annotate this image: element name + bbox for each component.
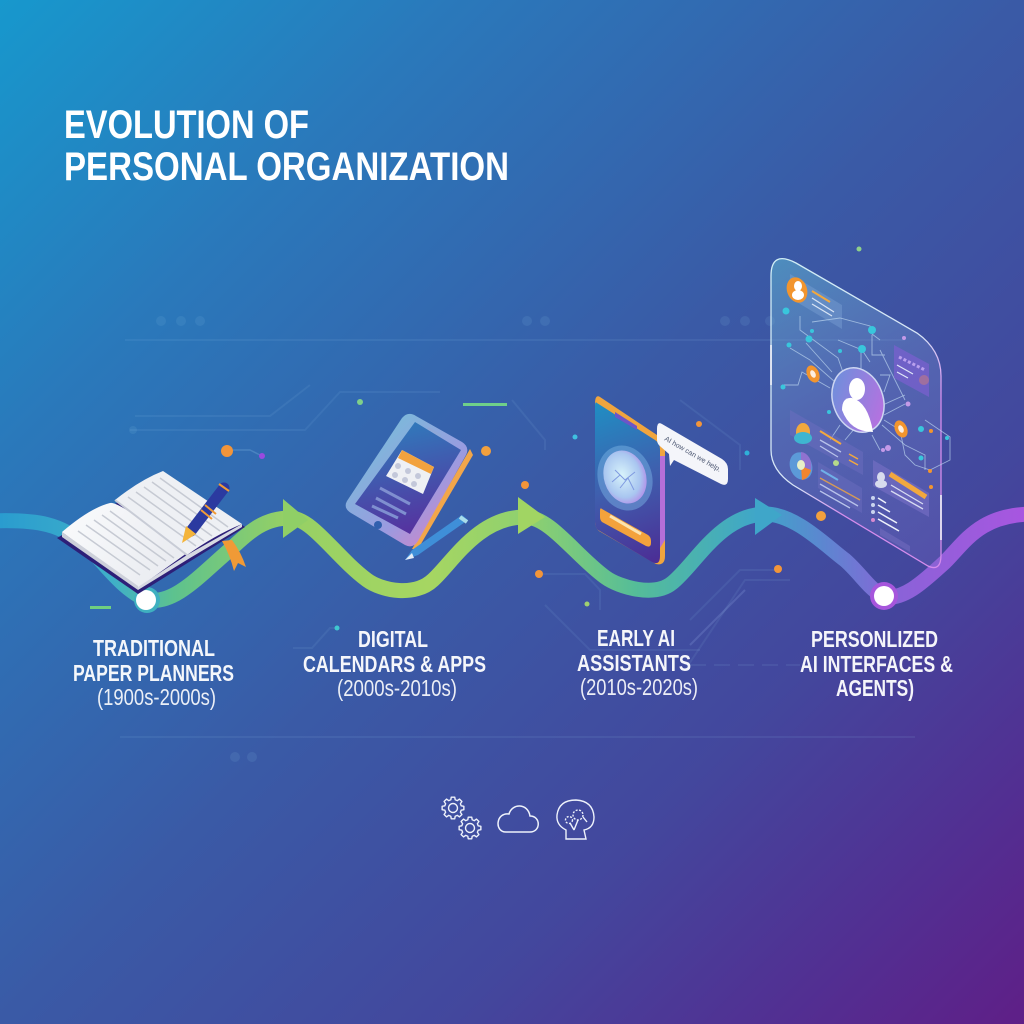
chat bubble (657, 423, 728, 485)
accent dots (90, 246, 862, 630)
label: early AI assistants: EARLY AI (597, 625, 675, 651)
label: digital calendars and apps (303, 626, 486, 701)
donut chart (786, 449, 816, 483)
label: traditional paper planners: (1900s-2000s) (97, 684, 216, 710)
title (64, 103, 509, 189)
icon: open planner book with pen (57, 471, 246, 594)
icon: tablet with calendar and stylus (346, 414, 473, 560)
network nodes (780, 308, 949, 489)
network lines (782, 316, 950, 470)
label: personalized AI interfaces and agents: AGENTS) (836, 675, 914, 701)
label: digital calendars and apps: (2000s-2010s) (337, 675, 457, 701)
label: early AI assistants (577, 625, 698, 700)
label: digital calendars and apps: CALENDARS & APPS (303, 651, 486, 677)
user card (783, 274, 842, 329)
label: personalized AI interfaces and agents: AI INTERFACES & (800, 651, 953, 677)
timeline ribbon with arrows (0, 497, 1024, 601)
icon: phone with AI orb and chat bubble (589, 396, 728, 564)
background circuit decoration (120, 316, 915, 762)
node: personalized AI (870, 582, 898, 610)
icon: head with brain network (557, 800, 594, 839)
chat bubble: AI how can we help. (663, 436, 722, 474)
panel: holographic AI interface (771, 259, 950, 568)
title: EVOLUTION OF (64, 103, 309, 147)
avatar hub (823, 360, 893, 440)
label: traditional paper planners: TRADITIONAL (93, 635, 215, 661)
node: paper planners (134, 587, 160, 613)
label: traditional paper planners: PAPER PLANNERS (73, 660, 234, 686)
purple badge card (894, 345, 929, 397)
icon: gears (442, 797, 481, 839)
label: early AI assistants: ASSISTANTS (577, 650, 691, 676)
label: digital calendars and apps: DIGITAL (358, 626, 428, 652)
label: personalized AI interfaces and agents (800, 626, 953, 701)
chart and list cards (786, 410, 929, 552)
title: PERSONAL ORGANIZATION (64, 145, 509, 189)
label: personalized AI interfaces and agents: PERSONLIZED (811, 626, 938, 652)
label: early AI assistants: (2010s-2020s) (580, 674, 698, 700)
icon: cloud (498, 806, 538, 832)
label: traditional paper planners (73, 635, 234, 710)
